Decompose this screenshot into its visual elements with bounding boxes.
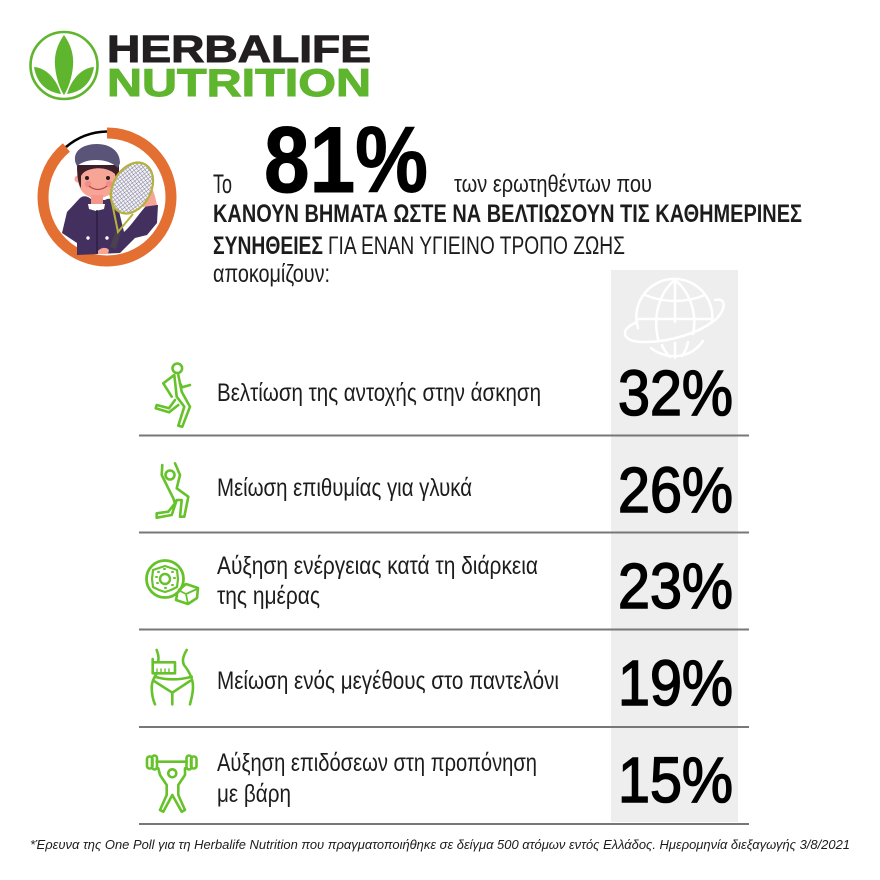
- logo: Herbalife Nutrition: NUTRITION: [107, 62, 371, 105]
- logo: Herbalife Nutrition: HERBALIFE: [107, 29, 371, 71]
- text: intro "Το": Το: [213, 169, 232, 199]
- label: Αύξηση επιδόσεων στη προπόνηση: [217, 749, 537, 777]
- text: statement second line: ΓΙΑ ΕΝΑΝ ΥΓΙΕΙΝΟ ΤΡΟΠΟ ΖΩΗΣ: [328, 232, 625, 260]
- jacket: [62, 196, 158, 255]
- text: statement third line: αποκομίζουν:: [213, 260, 330, 288]
- icon: runner: [156, 364, 190, 427]
- value: 15%: 15%: [618, 744, 733, 816]
- label: Αύξηση ενέργειας κατά τη διάρκεια: [217, 552, 538, 580]
- label: [217, 749, 537, 808]
- label: με βάρη: [217, 780, 291, 808]
- row 1: endurance: [156, 357, 733, 429]
- logo: Herbalife Nutrition: [30, 29, 371, 105]
- hand: [143, 178, 157, 207]
- row 4: trouser size: [152, 647, 733, 719]
- label: της ημέρας: [217, 582, 320, 610]
- icon: progress ring with tennis player: [43, 132, 171, 261]
- footnote: *Έρευνα της One Poll για τη Herbalife Nutrition που πραγματοποιήθηκε σε δείγμα 500 ατόμων εντός Ελλάδος. Ημερομηνία διεξαγωγής 3/8/2021: [30, 838, 850, 852]
- text: statement second line: [213, 232, 625, 260]
- icon: weightlifter: [147, 756, 196, 812]
- icon: globe: [625, 279, 724, 358]
- value: 26%: 26%: [618, 454, 733, 526]
- icon: donut and sugar cube: [146, 560, 198, 604]
- cap: [75, 144, 120, 168]
- hair: [77, 165, 119, 188]
- icon: waist and tape measure: [152, 650, 193, 704]
- shirt: [88, 204, 105, 211]
- heading: 81%: 81%: [264, 107, 428, 212]
- row 2: sugar cravings: [157, 454, 733, 526]
- text: statement second line: ΣΥΝΗΘΕΙΕΣ: [213, 232, 323, 260]
- label: Μείωση ενός μεγέθους στο παντελόνι: [217, 667, 559, 695]
- row divider lines: [139, 436, 749, 824]
- label: [217, 552, 538, 610]
- gray column: global percentages: [611, 270, 738, 822]
- value: 32%: 32%: [618, 357, 733, 429]
- label: Βελτίωση της αντοχής στην άσκηση: [217, 379, 541, 407]
- face: [78, 165, 117, 198]
- text: intro continuation: των ερωτηθέντων που: [454, 171, 652, 198]
- label: Μείωση επιθυμίας για γλυκά: [217, 474, 472, 502]
- row 5: weights: [147, 744, 733, 816]
- value: 19%: 19%: [618, 647, 733, 719]
- icon: stretching person: [157, 463, 188, 518]
- row 3: energy: [146, 550, 733, 622]
- racket: [113, 232, 118, 248]
- value: 23%: 23%: [618, 550, 733, 622]
